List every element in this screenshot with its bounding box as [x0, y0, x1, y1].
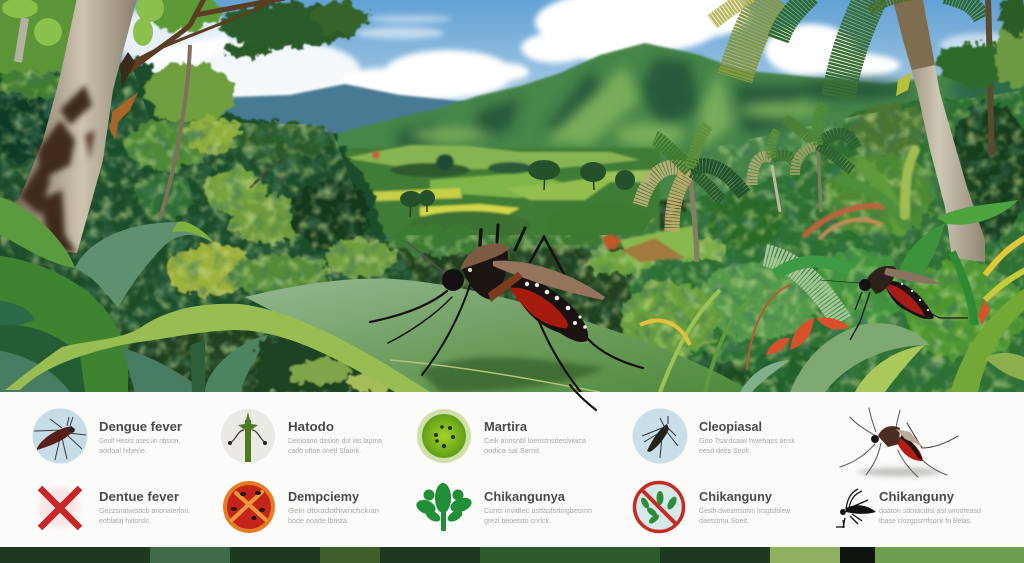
description: daetstma Soeit. — [699, 518, 749, 525]
description: Gesth dweatnsotvn hrsgtsfolew — [699, 508, 791, 515]
description — [288, 438, 382, 455]
heading: Chikanguny — [879, 490, 954, 504]
icon: orange circle — [223, 481, 275, 533]
description: Ceik aonsnbl loenstnsdeslviwca — [484, 438, 586, 445]
item: Dempciemy — [223, 481, 379, 533]
round tree — [236, 123, 328, 198]
right palm trunk and fronds — [712, 0, 1024, 262]
foreground left leaves — [0, 195, 268, 392]
left tree canopy — [0, 0, 368, 218]
description: thase clozgpsrrtfsock fn Belas. — [879, 518, 972, 525]
distant blue mountain — [205, 84, 490, 150]
mosquito abdomen — [510, 277, 588, 342]
main mosquito on leaf — [370, 225, 643, 410]
heading: Hatodo — [288, 420, 334, 434]
description: Conts invidtec astfasfsrtvigbeomn — [484, 508, 592, 515]
description: Goo Tsardsaiw hwehass ansk — [699, 438, 796, 445]
description: eohlafaj hxtorslc. — [99, 518, 151, 525]
description — [484, 508, 592, 525]
heading: Chikangunya — [484, 490, 566, 504]
icon: dark mosquito in blue circle — [632, 408, 688, 464]
icon: green cell — [417, 409, 471, 463]
field with path — [602, 225, 700, 262]
description: eesd detis Seok. — [699, 448, 751, 455]
description — [288, 508, 379, 525]
description: cado oftoe onetl Sfaork. — [288, 448, 361, 455]
heading: Chikanguny — [699, 490, 772, 504]
valley fields — [320, 145, 660, 248]
mosquito legs — [370, 225, 643, 410]
large central leaf — [245, 278, 752, 392]
right jungle — [588, 90, 1024, 400]
mountain light ridges — [410, 65, 820, 150]
description: grezl beoetsto cnrlck. — [484, 518, 551, 525]
description — [699, 508, 791, 525]
description: Geln dtoradothiwnchckian — [288, 508, 379, 515]
leaf stem highlight — [5, 304, 430, 392]
mosquito leg overlapping panel — [570, 385, 596, 410]
description — [99, 508, 190, 525]
item: Chikangunya leaf — [414, 483, 592, 531]
red fronds of big plant — [805, 150, 915, 238]
small mosquito on right — [820, 266, 968, 340]
illustration: red mosquito with shadow — [840, 408, 958, 477]
item: Cleopiasal — [632, 408, 796, 464]
description: Gezzsnatwlsocb anonaterlon, — [99, 508, 190, 515]
description: aodoal hiberie. — [99, 448, 147, 455]
green mountain — [320, 43, 1024, 200]
valley palms — [400, 160, 635, 217]
foreground right leaves — [640, 200, 1024, 392]
item: Chikanguny black mosquito — [836, 489, 981, 528]
mountain shadows — [395, 58, 1024, 148]
description: Denioano daslon dol ias lapma — [288, 438, 382, 445]
left dark forest — [0, 33, 490, 330]
item: Chikanguny prohibition — [634, 482, 791, 532]
description — [699, 438, 796, 455]
icon: mosquito in blue circle — [32, 408, 88, 464]
white information panel — [0, 392, 1024, 547]
description: bode eoade lbnsta. — [288, 518, 349, 525]
description — [879, 508, 981, 525]
heading: Martira — [484, 420, 528, 434]
mosquito head — [442, 269, 464, 291]
bottom foliage strip — [0, 547, 1024, 563]
icon: red cross — [39, 487, 80, 528]
sky — [0, 0, 1024, 170]
palm trees — [640, 105, 856, 262]
mosquito wing — [493, 261, 605, 300]
heading: Dempciemy — [288, 490, 359, 504]
clouds — [110, 0, 1024, 104]
description: doaton sdotacdtsl ast wrooteasd — [879, 508, 981, 515]
icon: green arrow plant — [221, 409, 275, 463]
description: Geolf Hesist ases iin ribsion, — [99, 438, 180, 445]
understory under big leaf — [255, 340, 410, 392]
description: ondica sal Semit. — [484, 448, 541, 455]
description — [484, 438, 586, 455]
item: Martira — [417, 409, 586, 463]
foliage mottling — [0, 60, 1024, 392]
jungle landscape background — [0, 0, 1024, 392]
item: Dengue fever — [32, 408, 182, 464]
icon: prohibition sign with leaves — [634, 482, 684, 532]
item: Hatodo — [221, 409, 382, 463]
heading: Dengue fever — [99, 420, 182, 434]
red plant leaves — [766, 300, 990, 355]
description — [99, 438, 180, 455]
icon: black mosquito — [836, 489, 876, 528]
left tree trunk — [15, 0, 138, 253]
item: Dentue fever — [39, 487, 190, 528]
heading: Cleopiasal — [699, 420, 762, 434]
icon: green leaf tree — [414, 483, 474, 531]
heading: Dentue fever — [99, 490, 179, 504]
mosquito thorax — [462, 246, 508, 300]
